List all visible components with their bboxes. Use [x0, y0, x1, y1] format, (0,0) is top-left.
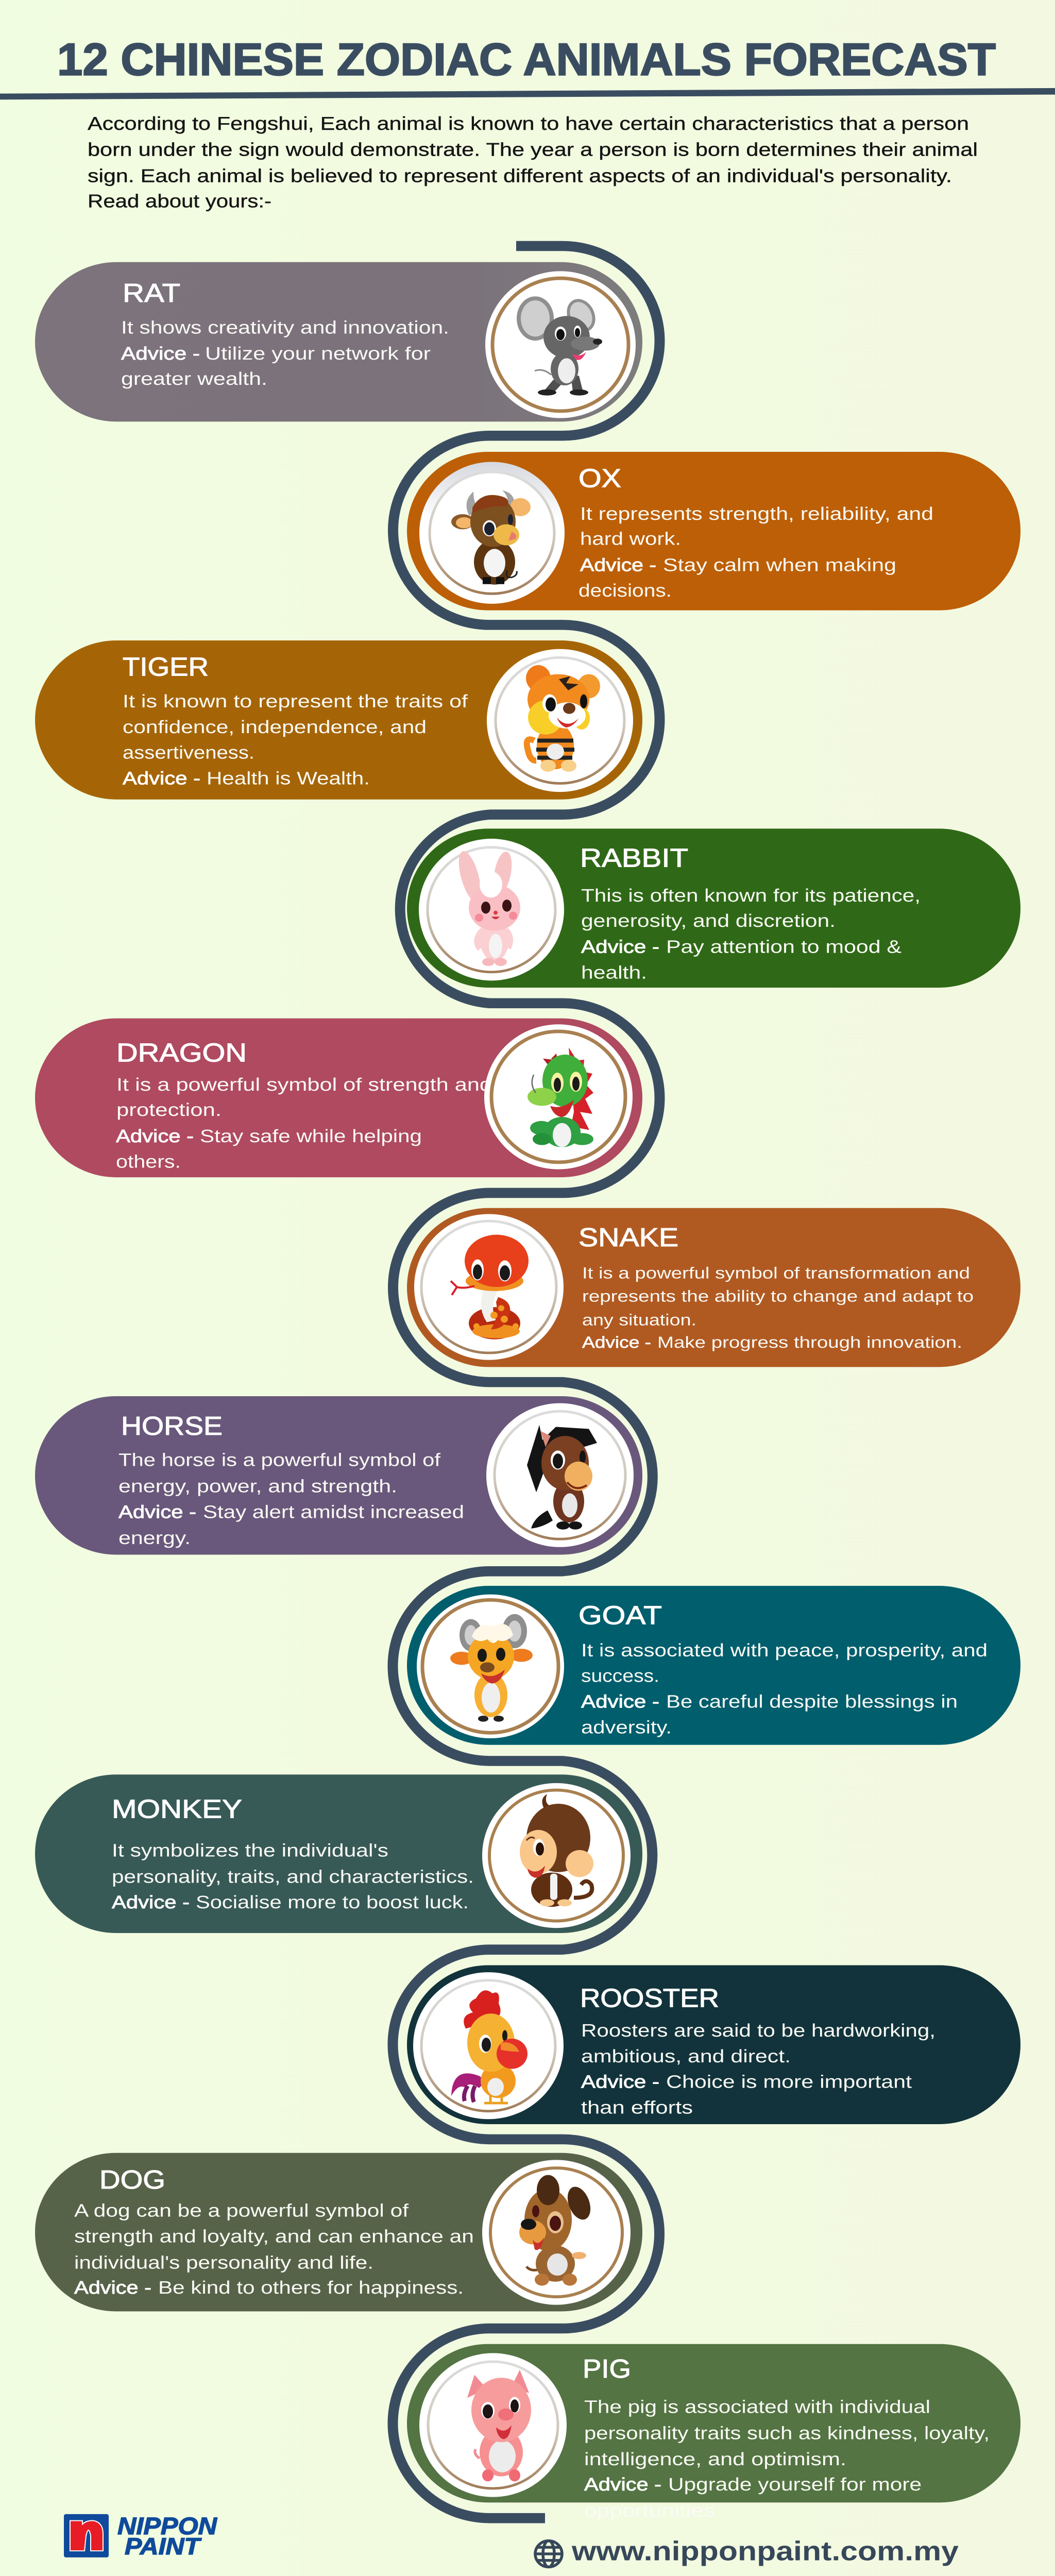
icon: goat [417, 1595, 564, 1738]
description: Advice - [123, 768, 200, 788]
description [581, 1640, 988, 1737]
panel: rat [35, 262, 642, 421]
panel: monkey [35, 1774, 642, 1933]
description: It is associated with peace, prosperity, and [581, 1640, 988, 1660]
icon: tiger [487, 649, 633, 792]
title: 12 CHINESE ZODIAC ANIMALS FORECAST [57, 35, 996, 85]
description: Advice - [581, 1691, 659, 1711]
description: This is often known for its patience, [581, 885, 921, 906]
description: Advice - [581, 936, 659, 957]
description [121, 317, 449, 389]
description [123, 691, 468, 788]
logo: Nippon Paint: NIPPON [117, 2513, 217, 2540]
description: protection. [116, 1099, 222, 1120]
heading: DOG [99, 2165, 165, 2195]
pill [35, 1774, 642, 1933]
description: Be careful despite blessings in [666, 1691, 958, 1711]
description: than efforts [581, 2097, 693, 2117]
description [112, 1840, 474, 1912]
pill [35, 262, 642, 421]
description: Stay alert amidst increased [203, 1501, 464, 1522]
description: It symbolizes the individual's [112, 1840, 388, 1860]
icon: rat [485, 271, 636, 418]
heading: MONKEY [112, 1794, 242, 1824]
description: Advice - [581, 2072, 659, 2092]
logo: Nippon Paint: PAINT [125, 2533, 202, 2560]
intro text block: According to Fengshui, Each animal is known to have certain characteristics that a person [88, 113, 969, 134]
icon: rabbit [419, 839, 564, 980]
title underline [0, 88, 1055, 99]
description: It is a powerful symbol of strength and [116, 1074, 492, 1095]
description: Make progress through innovation. [657, 1333, 962, 1351]
icon: monkey [482, 1783, 631, 1928]
description: A dog can be a powerful symbol of [74, 2200, 409, 2221]
heading: DRAGON [116, 1039, 247, 1067]
pill [35, 640, 642, 800]
description: personality traits such as kindness, loyalty, [584, 2422, 990, 2443]
panel: horse [35, 1396, 642, 1555]
panel: tiger [35, 640, 642, 800]
description: Advice - [112, 1892, 190, 1912]
description: adversity. [581, 1717, 672, 1737]
panel: dragon [35, 1019, 642, 1177]
description: Choice is more important [666, 2072, 912, 2092]
icon: snake [414, 1214, 564, 1360]
pill [407, 1208, 1020, 1367]
panel: rooster [407, 1965, 1020, 2124]
heading: TIGER [123, 653, 209, 682]
description: It is known to represent the traits of [123, 691, 468, 711]
description: Be kind to others for happiness. [158, 2277, 464, 2298]
description: success. [581, 1665, 659, 1686]
description: Utilize your network for [205, 343, 431, 364]
description: Advice - [74, 2277, 151, 2298]
heading: ROOSTER [580, 1984, 719, 2013]
description [581, 885, 921, 982]
description: Pay attention to mood & [666, 936, 901, 957]
description: energy. [118, 1528, 191, 1548]
description: Upgrade yourself for more [668, 2474, 922, 2495]
heading: SNAKE [578, 1223, 678, 1252]
icon: ox [419, 462, 565, 604]
description [74, 2200, 474, 2298]
description: any situation. [582, 1311, 696, 1329]
description: health. [581, 962, 647, 982]
description: Socialise more to boost luck. [196, 1892, 469, 1912]
description [116, 1074, 492, 1172]
website url: www.nipponpaint.com.my [571, 2536, 959, 2566]
description [584, 2396, 990, 2521]
description: opportunities [584, 2500, 715, 2521]
description: individual's personality and life. [74, 2252, 373, 2273]
icon: dog [482, 2160, 631, 2305]
description: Roosters are said to be hardworking, [581, 2020, 935, 2041]
pill [35, 1396, 642, 1555]
description [118, 1449, 464, 1548]
description: generosity, and discretion. [581, 910, 836, 931]
description: Advice - [582, 1333, 651, 1351]
pill [407, 452, 1020, 611]
description: ambitious, and direct. [581, 2046, 791, 2066]
description: Advice - [118, 1501, 196, 1522]
description: It shows creativity and innovation. [121, 317, 449, 337]
panel: pig [407, 2344, 1020, 2521]
heading: PIG [583, 2354, 631, 2384]
description [582, 1264, 974, 1351]
heading: OX [578, 464, 621, 493]
pill [407, 1586, 1020, 1745]
description: hard work. [580, 528, 681, 549]
description: others. [116, 1151, 181, 1172]
description: intelligence, and optimism. [584, 2449, 846, 2469]
heading: RAT [123, 279, 180, 308]
intro text block [88, 113, 978, 211]
icon: globe [535, 2541, 562, 2567]
intro text block: sign. Each animal is believed to represent different aspects of an individual's personality. [88, 165, 952, 186]
heading: HORSE [121, 1412, 223, 1441]
pill [35, 1019, 642, 1177]
pill [407, 2344, 1020, 2502]
pill [407, 1965, 1020, 2124]
description: It represents strength, reliability, and [580, 503, 933, 524]
panel: ox [407, 452, 1020, 611]
description [578, 503, 933, 601]
description: Advice - [580, 554, 656, 575]
description: greater wealth. [121, 368, 267, 389]
description: decisions. [578, 580, 672, 601]
description: Advice - [584, 2474, 661, 2495]
panel: rabbit [407, 828, 1020, 988]
description: Stay calm when making [663, 554, 896, 575]
description: The horse is a powerful symbol of [118, 1449, 441, 1470]
logo: Nippon Paint [64, 2513, 217, 2560]
description: Advice - [121, 343, 200, 364]
description: energy, power, and strength. [118, 1476, 397, 1496]
intro text block: Read about yours:- [88, 191, 271, 211]
description: represents the ability to change and adapt to [582, 1287, 974, 1305]
icon: horse [486, 1403, 634, 1547]
description: It is a powerful symbol of transformation and [582, 1264, 970, 1282]
heading: GOAT [578, 1601, 662, 1630]
description: assertiveness. [123, 742, 254, 762]
description: confidence, independence, and [123, 717, 427, 737]
panel: dog [35, 2153, 642, 2311]
pill [407, 828, 1020, 988]
description: personality, traits, and characteristics. [112, 1866, 474, 1887]
icon: pig [419, 2353, 567, 2497]
description: Advice - [116, 1126, 194, 1146]
heading: RABBIT [580, 844, 688, 873]
description: The pig is associated with individual [584, 2396, 930, 2417]
icon: rooster [413, 1972, 564, 2119]
icon: dragon [484, 1024, 633, 1170]
description: strength and loyalty, and can enhance an [74, 2226, 474, 2246]
intro text block: born under the sign would demonstrate. The year a person is born determines their animal [88, 140, 978, 160]
winding track connecting the animals [393, 246, 659, 2518]
description [581, 2020, 935, 2117]
pill [35, 2153, 642, 2311]
description: Stay safe while helping [200, 1126, 422, 1146]
panel: goat [407, 1586, 1020, 1745]
panel: snake [407, 1208, 1020, 1367]
description: Health is Wealth. [207, 768, 370, 788]
